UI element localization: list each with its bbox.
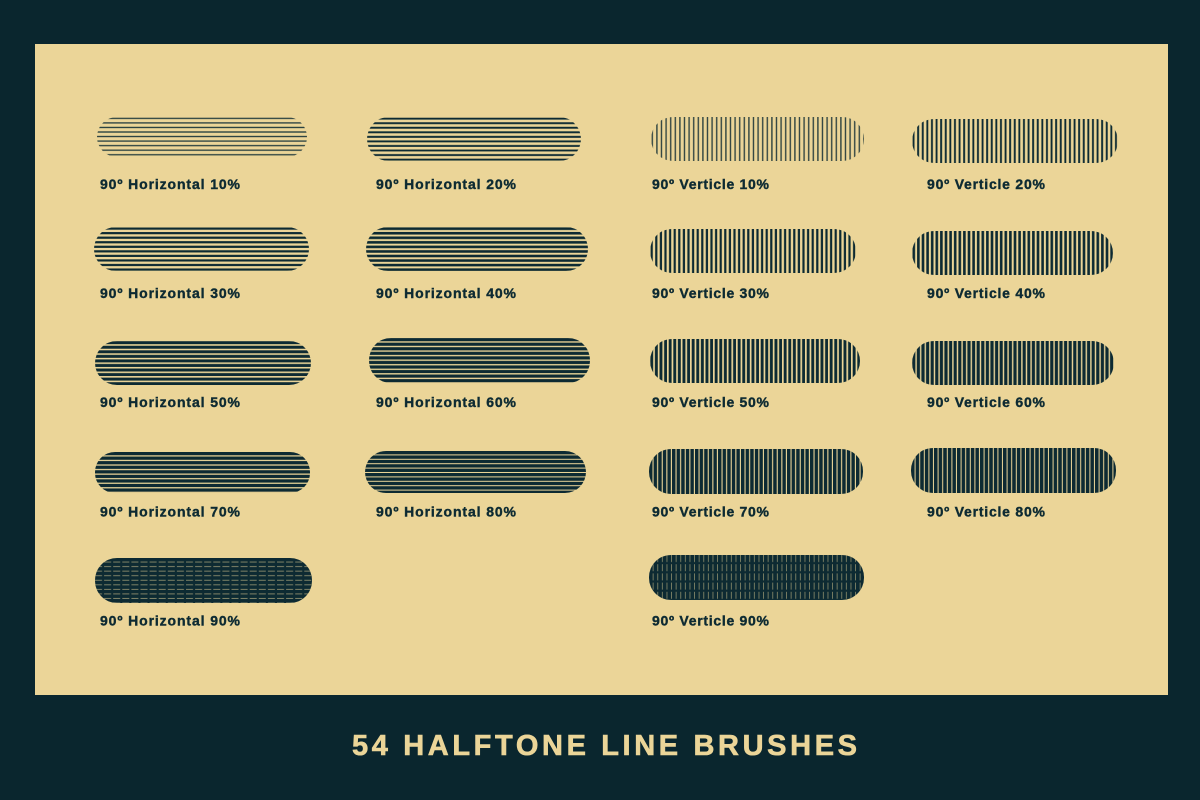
brush: 90º Horizontal 50%: 90º Horizontal 50% <box>100 394 241 410</box>
brush: 90º Horizontal 90% <box>95 558 312 628</box>
brush: 90º Horizontal 80% <box>365 451 586 520</box>
brush: 90º Verticle 20% <box>912 119 1118 192</box>
brush: 90º Horizontal 20%: 90º Horizontal 20% <box>376 176 517 192</box>
brush: 90º Horizontal 10% <box>97 117 307 192</box>
brush: 90º Verticle 30%: 90º Verticle 30% <box>652 285 770 301</box>
brush: 90º Verticle 90%: 90º Verticle 90% <box>652 612 770 628</box>
brush: 90º Verticle 70% <box>649 449 863 520</box>
brush: 90º Verticle 10%: 90º Verticle 10% <box>652 176 770 192</box>
brush: 90º Horizontal 10%: 90º Horizontal 10% <box>100 176 241 192</box>
brush: 90º Horizontal 40%: 90º Horizontal 40% <box>376 285 517 301</box>
brush: 90º Horizontal 30% <box>94 227 309 301</box>
brush: 90º Horizontal 80%: 90º Horizontal 80% <box>376 504 517 520</box>
brush: 90º Verticle 10% <box>651 117 864 192</box>
brush: 90º Horizontal 50% <box>95 341 311 410</box>
title: 54 HALFTONE LINE BRUSHES <box>352 730 857 762</box>
brush: 90º Verticle 50%: 90º Verticle 50% <box>652 394 770 410</box>
brush: 90º Verticle 80% <box>911 448 1116 520</box>
brush: 90º Verticle 60% <box>912 341 1114 410</box>
brush: 90º Horizontal 70% <box>95 452 310 520</box>
brush: 90º Horizontal 60% <box>369 338 590 410</box>
brush: 90º Verticle 40% <box>912 231 1113 301</box>
brush: 90º Horizontal 20% <box>367 117 581 192</box>
brush: 90º Horizontal 30%: 90º Horizontal 30% <box>100 285 241 301</box>
panel: brush samples <box>35 44 1168 695</box>
brush: 90º Verticle 90% <box>649 555 864 628</box>
brush: 90º Horizontal 60%: 90º Horizontal 60% <box>376 394 517 410</box>
brush: 90º Verticle 20%: 90º Verticle 20% <box>927 176 1046 192</box>
brush: 90º Verticle 50% <box>650 339 860 410</box>
brush: 90º Verticle 40%: 90º Verticle 40% <box>927 285 1046 301</box>
brush: 90º Horizontal 40% <box>366 227 588 301</box>
brush: 90º Verticle 80%: 90º Verticle 80% <box>927 504 1046 520</box>
brush: 90º Verticle 70%: 90º Verticle 70% <box>652 504 770 520</box>
brush: 90º Verticle 30% <box>650 229 856 301</box>
brush: 90º Horizontal 90%: 90º Horizontal 90% <box>100 612 241 628</box>
brush: 90º Horizontal 70%: 90º Horizontal 70% <box>100 504 241 520</box>
brush: 90º Verticle 60%: 90º Verticle 60% <box>927 394 1046 410</box>
